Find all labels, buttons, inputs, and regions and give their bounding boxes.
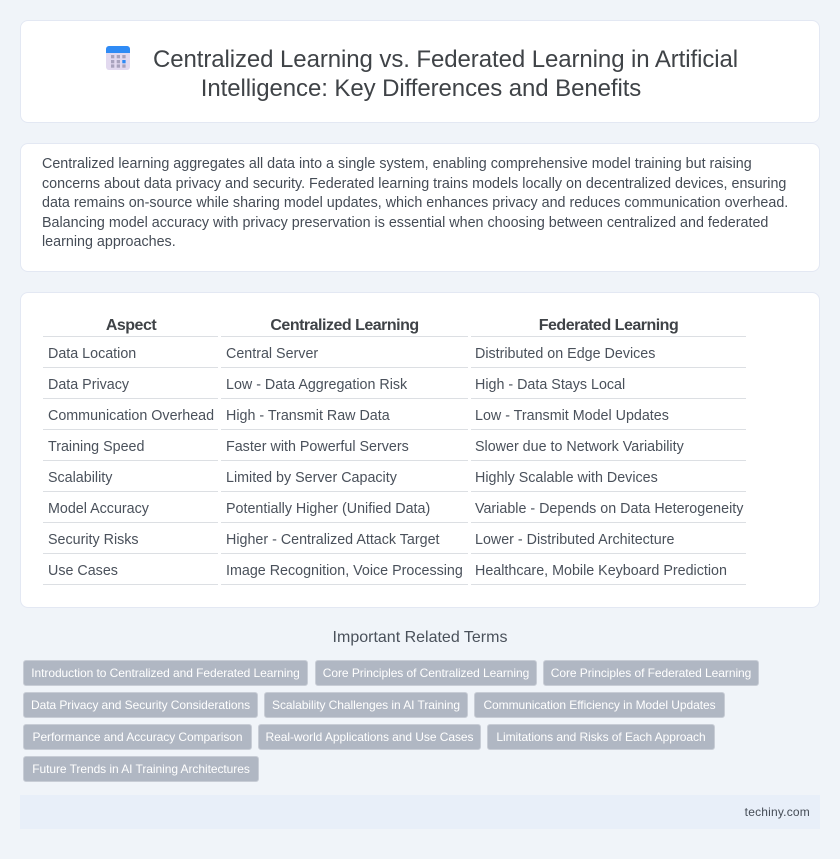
column: federated learning: Slower due to Network Variability	[475, 439, 684, 455]
related term tags: Communication Efficiency in Model Updates	[483, 698, 716, 712]
related term tags: Data Privacy and Security Considerations	[31, 698, 250, 712]
column: centralized learning: Potentially Higher (Unified Data)	[226, 501, 430, 517]
intro text: learning approaches.	[42, 234, 176, 250]
related term tags: Scalability Challenges in AI Training	[272, 698, 460, 712]
column: centralized learning: Central Server	[226, 346, 318, 362]
panel: comparison table	[20, 292, 820, 608]
related term tags: Real-world Applications and Use Cases	[266, 730, 473, 744]
footer	[20, 795, 820, 829]
related term tags: Core Principles of Centralized Learning	[323, 666, 529, 680]
intro text: Centralized learning aggregates all data into a single system, enabling comprehensive model training but raising	[42, 156, 752, 172]
related term tags: Core Principles of Federated Learning	[551, 666, 751, 680]
column: aspect	[48, 346, 214, 579]
column: centralized learning: Image Recognition, Voice Processing	[226, 563, 463, 579]
column: federated learning: Highly Scalable with Devices	[475, 470, 658, 486]
column: aspect: Data Location	[48, 346, 136, 362]
column: centralized learning: Faster with Powerful Servers	[226, 439, 409, 455]
column: federated learning: Variable - Depends on Data Heterogeneity	[475, 501, 743, 517]
title: Intelligence: Key Differences and Benefits	[201, 75, 641, 102]
related term tags: Performance and Accuracy Comparison	[32, 730, 242, 744]
table: comparison	[43, 317, 746, 585]
column: centralized learning	[226, 346, 463, 579]
column: aspect: Communication Overhead	[48, 408, 214, 424]
column headers	[106, 317, 678, 334]
column: federated learning: Distributed on Edge Devices	[475, 346, 655, 362]
title: ​Centralized Learning vs. Federated Learning in Artificial	[153, 46, 738, 73]
column: centralized learning: Limited by Server Capacity	[226, 470, 397, 486]
panel: title header	[20, 20, 820, 123]
related term tags: Introduction to Centralized and Federated Learning	[31, 666, 300, 680]
column headers: Centralized Learning	[270, 317, 419, 334]
column: federated learning: Low - Transmit Model Updates	[475, 408, 669, 424]
column headers: Aspect	[106, 317, 156, 334]
column: aspect: Scalability	[48, 470, 112, 486]
related term tags	[23, 660, 759, 782]
column: centralized learning: Low - Data Aggregation Risk	[226, 377, 407, 393]
column: centralized learning: Higher - Centralized Attack Target	[226, 532, 440, 548]
column: centralized learning: High - Transmit Raw Data	[226, 408, 390, 424]
column: federated learning: Healthcare, Mobile Keyboard Prediction	[475, 563, 727, 579]
column: aspect: Use Cases	[48, 563, 118, 579]
column: aspect: Data Privacy	[48, 377, 129, 393]
column: aspect: Training Speed	[48, 439, 144, 455]
column headers: Federated Learning	[539, 317, 678, 334]
panel: introduction	[20, 143, 820, 272]
column: federated learning	[475, 346, 744, 579]
intro text: data remains on-source while sharing model updates, which enhances privacy and reduces communication overhead.	[42, 195, 788, 211]
footer source text: techiny.com	[745, 805, 810, 819]
intro text: Balancing model accuracy with privacy preservation is essential when choosing between centralized and federated	[42, 215, 768, 231]
column: aspect: Security Risks	[48, 532, 139, 548]
column: federated learning: High - Data Stays Local	[475, 377, 625, 393]
heading: related terms: Important Related Terms	[333, 629, 507, 646]
intro text: concerns about data privacy and security. Federated learning trains models locally on decentralized devices, ensuring	[42, 176, 786, 192]
related term tags: Limitations and Risks of Each Approach	[496, 730, 706, 744]
title	[153, 46, 738, 102]
column: federated learning: Lower - Distributed Architecture	[475, 532, 674, 548]
icon: calendar	[106, 46, 130, 70]
intro text	[42, 156, 788, 250]
column: aspect: Model Accuracy	[48, 501, 149, 517]
related term tags: Future Trends in AI Training Architectures	[32, 762, 250, 776]
